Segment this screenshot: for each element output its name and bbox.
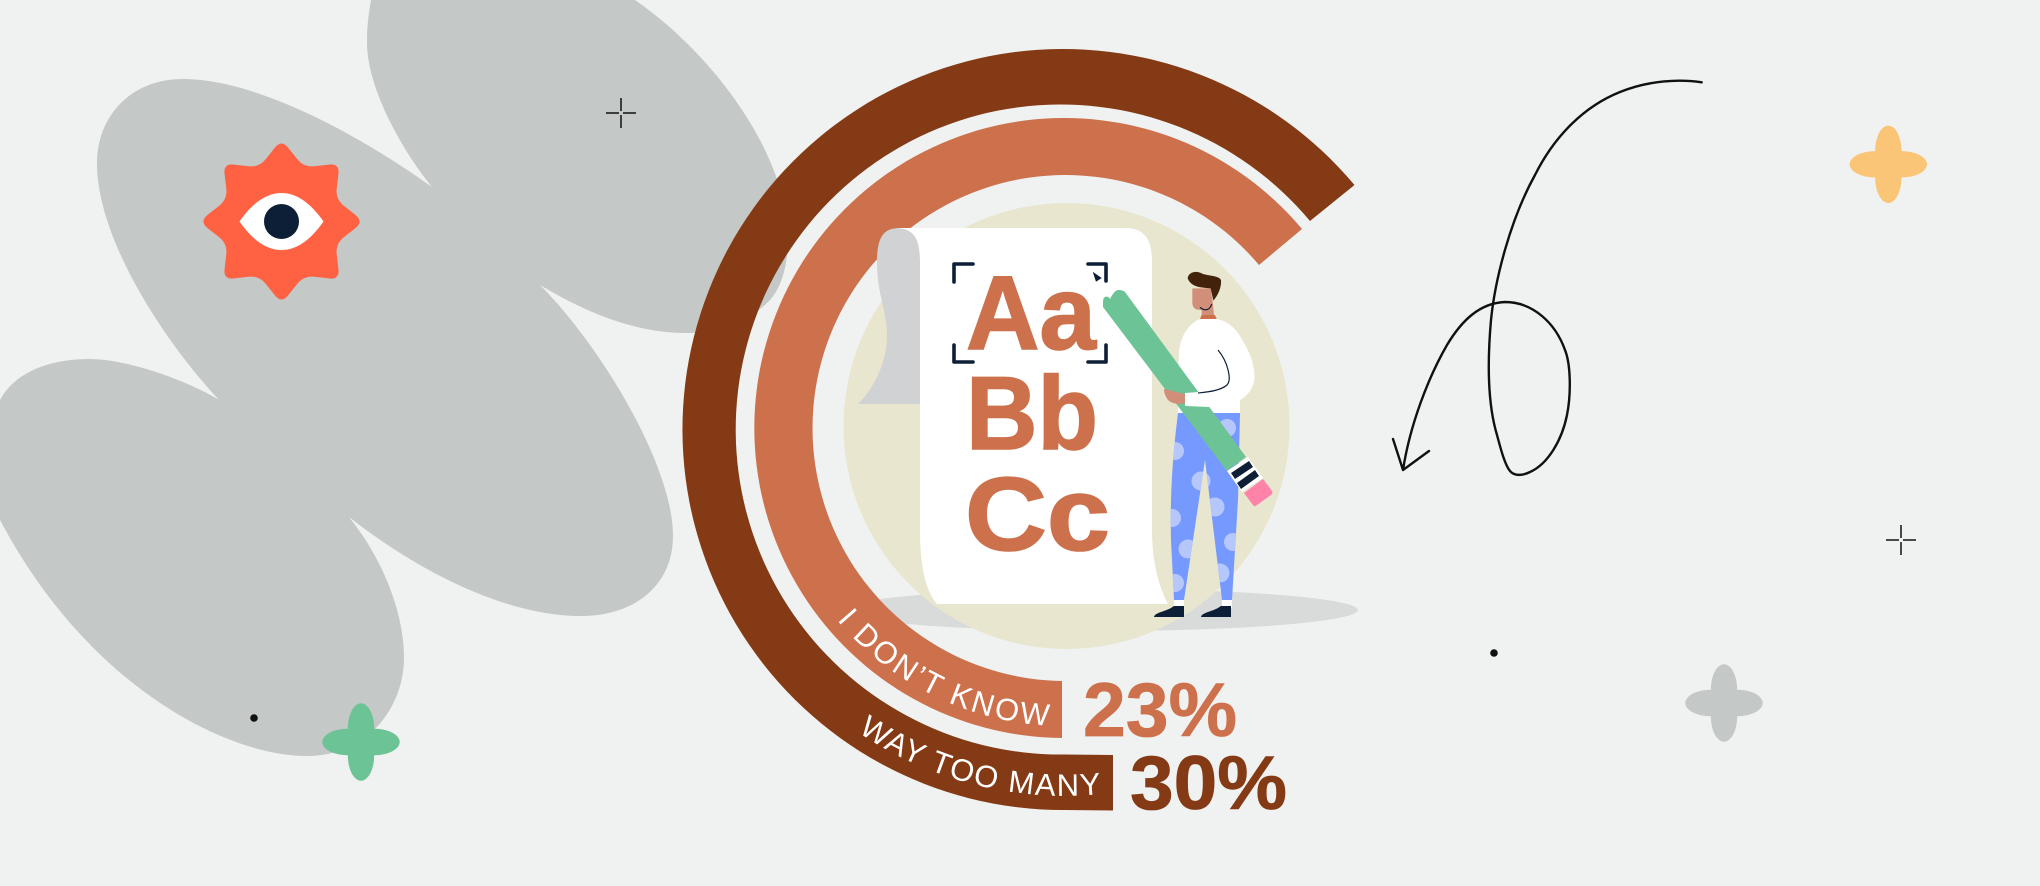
neck and face: [1188, 272, 1221, 319]
paper roll: [858, 228, 920, 404]
icon: gray plus: [1685, 664, 1763, 742]
icon: orange plus: [1850, 126, 1927, 203]
icon: crosshair top: [606, 98, 636, 128]
text: Aa: Aa: [966, 255, 1098, 372]
hand and sleeve: [1164, 350, 1229, 407]
sweater: [1178, 319, 1255, 413]
label: way too many: WAY TOO MANY: [863, 714, 1099, 796]
value: 30%: 30%: [1130, 741, 1287, 826]
value: 23%: 23%: [1083, 668, 1237, 753]
person illustration: [1103, 272, 1272, 617]
icon: green plus: [322, 703, 400, 781]
beige circle: [844, 203, 1290, 649]
ring: i don't know: [754, 118, 1302, 738]
pants: [1170, 413, 1240, 600]
label: I don't know: I DON’T KNOW: [838, 608, 1050, 726]
scroll paper: [858, 228, 1168, 604]
paper sheet: [895, 228, 1168, 604]
pencil: [1103, 290, 1272, 506]
shoes and socks: [1154, 600, 1232, 617]
ring: way too many: [682, 49, 1354, 811]
selection brackets and cursor: [954, 264, 1106, 362]
shadow ellipse: [842, 589, 1358, 631]
gray flower blob: [0, 0, 788, 756]
dot right: [1490, 649, 1498, 657]
arrow: curly line: [1393, 81, 1702, 475]
dot left: [250, 714, 258, 722]
icon: crosshair right: [1886, 525, 1916, 555]
icon: eye badge: [203, 143, 360, 300]
text: Bb: Bb: [966, 356, 1098, 472]
text: Cc: Cc: [965, 457, 1110, 573]
